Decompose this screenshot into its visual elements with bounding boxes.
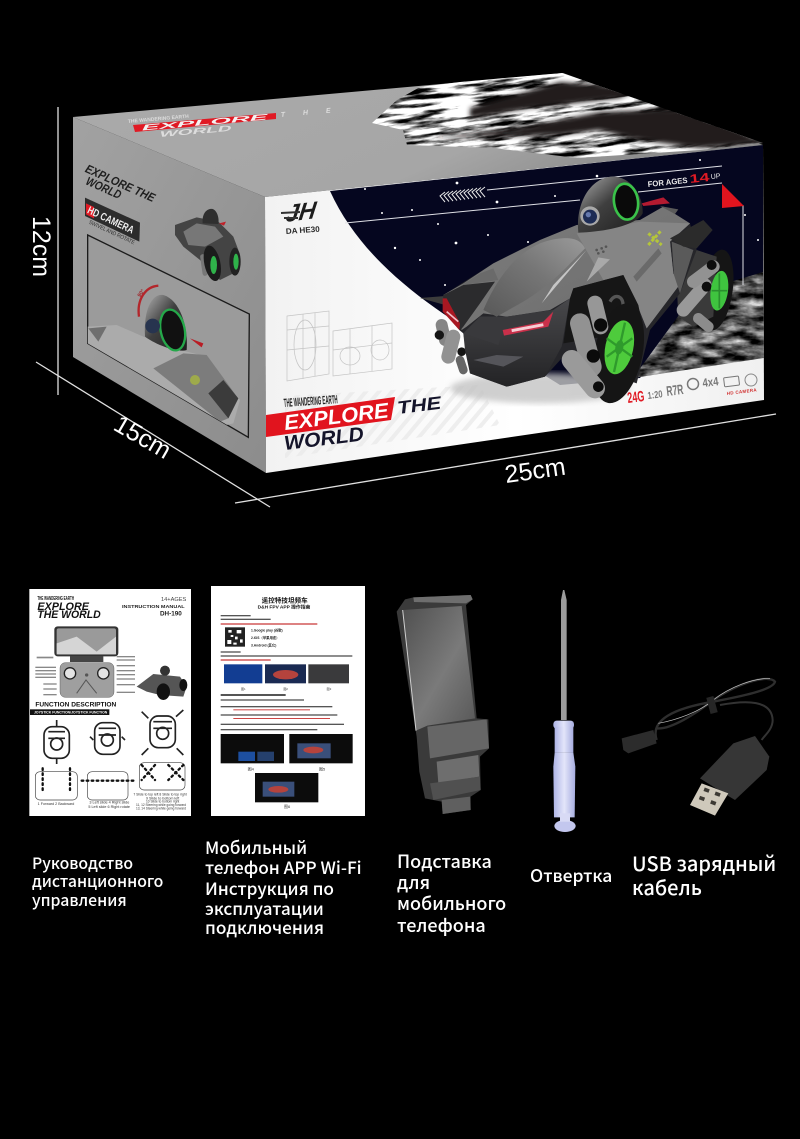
- side slogan: EXPLORE THE: [83, 162, 158, 205]
- app dark panels: 图5: [319, 765, 326, 771]
- screwdriver: [553, 590, 576, 832]
- front title: THE WANDERING EARTH: [283, 392, 338, 410]
- app dark panels: 图4: [248, 765, 255, 771]
- spec icons row: R7R: [665, 381, 684, 399]
- caption: mobile phone app wifi manual: Инструкция по: [205, 875, 334, 900]
- caption: mobile phone app wifi manual: телефон APP Wi-Fi: [205, 854, 362, 879]
- stars: [364, 159, 759, 286]
- car silhouette base: [443, 207, 697, 387]
- function captions: 7 Slide to top left 8 Slide to top right: [133, 792, 187, 796]
- download options: [251, 628, 283, 647]
- QR code: [225, 627, 245, 647]
- small car on side: [175, 209, 241, 283]
- rear-left rollers: [435, 325, 466, 370]
- app sheet title: 遥控特技坦频车: [262, 595, 308, 604]
- remote controller: [60, 663, 114, 697]
- age label: UP: [710, 173, 721, 181]
- function captions: 3 Left slide 4 Right slide: [89, 800, 129, 804]
- controller diagrams: [35, 763, 185, 800]
- ground shadow: [450, 373, 630, 403]
- box top face: [74, 73, 763, 197]
- front title: [266, 392, 443, 455]
- function description heading: [30, 703, 116, 715]
- front title: THE: [396, 393, 443, 418]
- shipping box illustration: [33, 73, 776, 508]
- front title: EXPLORE: [283, 399, 391, 435]
- app screenshots: 图1: [241, 687, 246, 691]
- RC stunt car on box: [435, 177, 738, 408]
- app screenshots: [224, 664, 349, 691]
- HD camera badge: SWIVEL AND ROTATE: [87, 220, 136, 246]
- blueprint sketches: [287, 311, 392, 381]
- phone holder: [397, 595, 489, 814]
- brand logo: JH: [284, 197, 319, 228]
- brand logo: [281, 197, 321, 236]
- dimension 12cm: 12cm: [27, 216, 55, 277]
- box top face: EXPLORE: [141, 112, 270, 132]
- caption: remote control manual: Руководство: [32, 851, 133, 874]
- caption: USB charging cable: USB зарядный: [632, 848, 776, 877]
- box top face: THE: [281, 107, 333, 119]
- spec icons row: 1:20: [647, 389, 664, 402]
- dimension 25cm: [235, 414, 776, 503]
- download options: 1.Google play (谷歌): [251, 628, 283, 633]
- accessories: [397, 590, 775, 832]
- manuals: [29, 586, 365, 816]
- front wheel: [563, 275, 652, 408]
- age label: [647, 170, 721, 189]
- app instruction sheet: [211, 586, 365, 816]
- box top face: WORLD: [159, 124, 232, 139]
- function captions: 5 Left slide 6 Right rotate: [88, 805, 130, 809]
- function description heading: FUNCTION DESCRIPTION: [35, 703, 116, 709]
- brand logo: DA HE30: [286, 225, 321, 236]
- box front face: [265, 145, 770, 473]
- car rear tail: [443, 282, 495, 331]
- caption: phone stand: для: [397, 869, 430, 895]
- moon surface: [638, 272, 764, 378]
- box left side face: [73, 117, 266, 473]
- spec icons row: 24G: [626, 388, 645, 407]
- dimension 15cm: [36, 362, 270, 507]
- caption: mobile phone app wifi manual: Мобильный: [205, 834, 307, 859]
- box top face: THE WANDERING EARTH: [128, 114, 189, 125]
- red corner flag: [722, 184, 744, 208]
- function captions: 9 Slide to bottom left: [146, 796, 179, 800]
- spec icons row: HD CAMERA: [727, 387, 758, 396]
- front title: WORLD: [283, 423, 365, 455]
- space background: [330, 145, 763, 385]
- car direction diagrams: [44, 710, 183, 764]
- app sheet title: D&H FPV APP 操作指南: [258, 604, 311, 611]
- manual title: INSTRUCTION MANUAL: [122, 604, 185, 610]
- camera dome: [578, 177, 643, 233]
- caption: phone stand: телефона: [397, 912, 486, 938]
- manual title: EXPLORE: [37, 601, 90, 613]
- side slogan: WORLD: [84, 174, 124, 202]
- age label: 14: [689, 170, 711, 186]
- app screenshots: 图3: [327, 687, 332, 691]
- dimension 25cm: 25cm: [503, 453, 567, 489]
- remote control manual sheet: [29, 589, 191, 816]
- USB charging cable: [622, 678, 775, 816]
- app dark panels: [221, 734, 353, 809]
- caption: mobile phone app wifi manual: подключения: [205, 914, 324, 939]
- car body: [443, 197, 713, 330]
- caption: phone stand: мобильного: [397, 890, 506, 916]
- spec icons row: 4x4: [702, 374, 719, 390]
- car front lower: [463, 298, 570, 387]
- caption: mobile phone app wifi manual: эксплуатации: [205, 895, 324, 920]
- manual title: THE WORLD: [37, 609, 101, 621]
- space decorative lines and chevrons: [345, 166, 743, 285]
- function captions: 1 Forward 2 Backward: [38, 802, 74, 806]
- manual car image: [137, 666, 187, 700]
- camera close-up frame: [87, 235, 249, 437]
- caption: remote control manual: дистанционного: [32, 869, 163, 892]
- HD camera badge: HD CAMERA: [85, 205, 136, 237]
- function captions: 13, 14 Steering while going forward: [136, 806, 186, 810]
- caption: screwdriver: Отвертка: [530, 863, 612, 888]
- app sheet title: [258, 595, 311, 611]
- HD camera badge: [85, 198, 140, 246]
- phone on remote: [54, 626, 118, 662]
- download options: 3.Android (其它): [251, 642, 276, 647]
- manual title: 14+AGES: [161, 597, 187, 603]
- function captions: [38, 792, 187, 810]
- manual title: [37, 596, 187, 621]
- download options: 2.IOS（苹果用途）: [251, 635, 279, 640]
- caption: remote control manual: управления: [32, 888, 127, 911]
- manual title: DH-190: [160, 611, 182, 618]
- caption: USB charging cable: кабель: [632, 872, 702, 901]
- caption: phone stand: Подставка: [397, 848, 492, 874]
- age label: FOR AGES: [647, 176, 689, 189]
- text lines: [221, 615, 352, 730]
- spec icons row: [626, 374, 758, 407]
- remote callouts: [35, 656, 135, 695]
- app screenshots: 图2: [283, 687, 288, 691]
- function description heading: JOYSTICK FUNCTION/JOYSTICK FUNCTION: [34, 711, 108, 715]
- camera close-up frame: 90°: [137, 288, 146, 298]
- dimension 15cm: 15cm: [109, 410, 176, 465]
- function captions: 11, 12 Steering while going forward: [136, 803, 186, 807]
- app dark panels: 图6: [284, 803, 291, 809]
- function captions: 10 Slide to bottom right: [146, 800, 179, 804]
- rear wheel: [677, 248, 738, 332]
- stripe band: [285, 385, 500, 458]
- manual title: THE WANDERING EARTH: [37, 596, 74, 602]
